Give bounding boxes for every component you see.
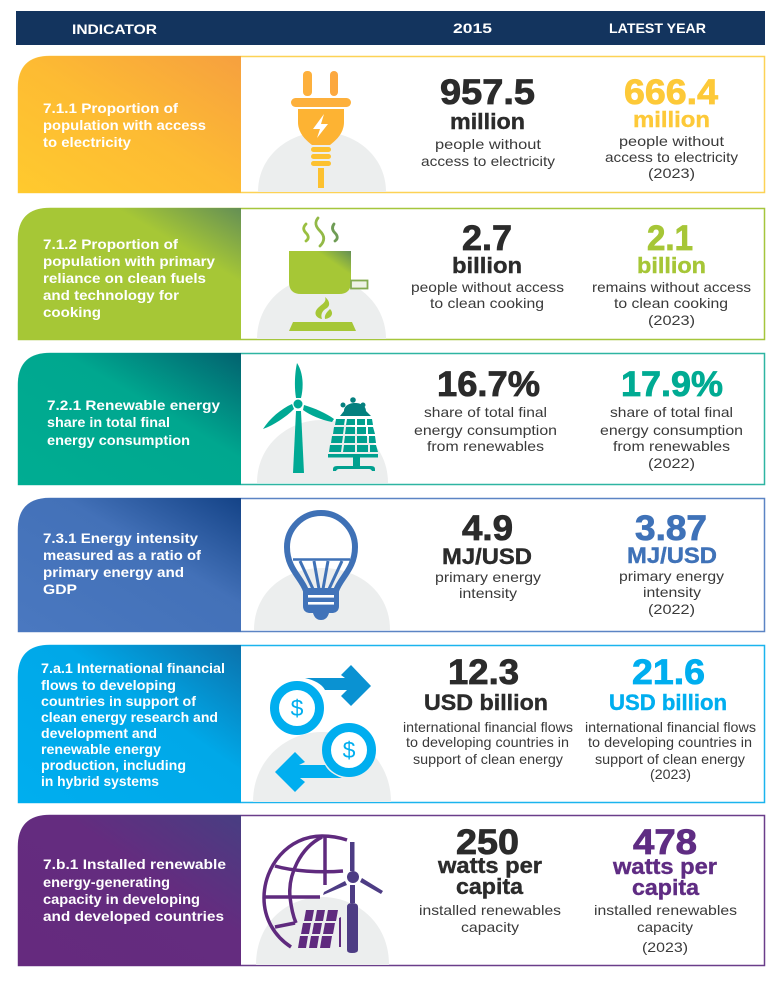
2015 value: clean cooking: people without access [411, 279, 564, 295]
2015 value: financial flows [403, 653, 573, 767]
latest value: renewable share: 17.9% [621, 365, 723, 404]
latest value: installed capacity: installed renewables [594, 902, 737, 918]
2015 value: financial flows: to developing countries in [406, 734, 569, 750]
header bar: 2015 [453, 20, 492, 36]
row: 7.1.1 electricity [18, 56, 764, 193]
latest value: electricity: (2023) [648, 165, 695, 181]
icon: cooking pot [257, 218, 386, 339]
latest value: renewable share: from renewables [613, 438, 730, 454]
icon: money flow arrows: $ [343, 737, 356, 763]
2015 value: installed capacity: capacity [461, 919, 519, 935]
2015 value: electricity: people without [435, 136, 541, 152]
indicator panel 7.a.1: clean energy research and [41, 709, 218, 725]
2015 value: clean cooking: billion [452, 253, 522, 278]
latest value: energy intensity: MJ/USD [627, 543, 717, 568]
latest value: electricity [605, 73, 738, 181]
latest value: installed capacity: capita [632, 875, 700, 900]
indicator panel 7.3.1 [18, 498, 241, 632]
2015 value: energy intensity: 4.9 [462, 509, 513, 548]
2015 value: energy intensity [435, 509, 541, 601]
indicator panel 7.a.1: in hybrid systems [41, 773, 159, 789]
indicator panel 7.1.2: cooking [43, 304, 101, 320]
2015 value: electricity: 957.5 [440, 73, 535, 112]
latest value: energy intensity [619, 509, 724, 617]
latest value: installed capacity: watts per [612, 854, 717, 879]
2015 value: installed capacity: watts per [437, 853, 542, 878]
indicator panel 7.a.1: production, including [41, 757, 186, 773]
indicator panel 7.a.1: 7.a.1 International financial [41, 660, 225, 676]
latest value: installed capacity [594, 823, 737, 955]
indicator panel 7.1.1 [18, 56, 241, 193]
latest value: clean cooking: remains without access [592, 279, 751, 295]
2015 value: installed capacity [419, 823, 561, 935]
latest value: financial flows: international financial flows [585, 719, 756, 735]
latest value: renewable share: (2022) [648, 455, 695, 471]
2015 value: electricity: access to electricity [421, 153, 555, 169]
latest value: renewable share: energy consumption [600, 422, 743, 438]
row: 7.1.2 clean cooking [18, 208, 764, 340]
2015 value: installed capacity: installed renewables [419, 902, 561, 918]
indicator panel 7.1.2: and technology for [43, 287, 180, 303]
2015 value: financial flows: 12.3 [448, 653, 519, 692]
2015 value: financial flows: support of clean energy [413, 751, 563, 767]
2015 value: electricity: million [450, 109, 525, 134]
indicator panel 7.a.1: flows to developing [41, 677, 176, 693]
indicator panel 7.1.2 [18, 208, 241, 340]
indicator panel 7.2.1 [18, 353, 241, 485]
indicator panel 7.2.1: energy consumption [47, 432, 190, 448]
latest value: energy intensity: primary energy [619, 568, 724, 584]
indicator panel 7.1.2: population with primary [43, 253, 215, 269]
latest value: energy intensity: intensity [643, 584, 701, 600]
icon: light bulb [254, 513, 390, 630]
latest value: renewable share [600, 365, 743, 471]
row: 7.a.1 financial flows [18, 645, 764, 803]
latest value: installed capacity: (2023) [642, 939, 688, 955]
latest value: financial flows: USD billion [609, 690, 727, 715]
icon: plug [258, 71, 386, 192]
indicator panel 7.3.1: GDP [43, 581, 77, 597]
indicator panel 7.1.1: to electricity [43, 134, 131, 150]
latest value: energy intensity: 3.87 [635, 509, 707, 548]
latest value: clean cooking: billion [637, 253, 706, 278]
indicator panel 7.a.1: renewable energy [41, 741, 161, 757]
indicator panel 7.b.1: 7.b.1 Installed renewable [43, 856, 226, 872]
latest value: installed capacity: capacity [637, 919, 693, 935]
2015 value: energy intensity: primary energy [435, 569, 541, 585]
2015 value: financial flows: international financial flows [403, 719, 573, 735]
2015 value: electricity [421, 73, 555, 169]
indicator panel 7.2.1: share in total final [47, 414, 170, 430]
icon: money flow arrows: $ [291, 695, 304, 721]
indicator panel 7.a.1: development and [41, 725, 157, 741]
icon: wind turbine and solar panel [257, 363, 388, 483]
latest value: installed capacity: 478 [633, 823, 697, 862]
latest value: energy intensity: (2022) [648, 601, 695, 617]
indicator panel 7.3.1: primary energy and [43, 564, 184, 580]
indicator panel 7.a.1: countries in support of [41, 693, 196, 709]
latest value: electricity: people without [619, 133, 724, 149]
latest value: renewable share: share of total final [610, 404, 733, 420]
2015 value: installed capacity: capita [456, 874, 524, 899]
indicator panel 7.1.2: 7.1.2 Proportion of [43, 236, 178, 252]
latest value: financial flows: support of clean energy [595, 751, 745, 767]
2015 value: clean cooking: 2.7 [462, 219, 512, 258]
latest value: financial flows: (2023) [650, 766, 691, 782]
latest value: financial flows: 21.6 [632, 653, 705, 692]
2015 value: financial flows: USD billion [424, 690, 548, 715]
indicator panel 7.b.1: capacity in developing [43, 891, 200, 907]
indicator panel 7.a.1 [18, 645, 241, 803]
2015 value: energy intensity: intensity [459, 585, 517, 601]
indicator panel 7.b.1: energy-generating [43, 874, 170, 890]
latest value: financial flows [585, 653, 756, 782]
row: 7.2.1 renewable share [18, 353, 764, 485]
header bar: LATEST YEAR [609, 20, 706, 36]
latest value: electricity: million [633, 107, 710, 132]
icon: globe, turbine and solar panel [256, 836, 389, 965]
icon: money flow arrows [253, 665, 391, 802]
header bar [16, 11, 765, 45]
latest value: financial flows: to developing countries in [588, 734, 752, 750]
indicator panel 7.2.1: 7.2.1 Renewable energy [47, 397, 220, 413]
2015 value: installed capacity: 250 [456, 823, 519, 862]
latest value: clean cooking: 2.1 [647, 219, 693, 258]
2015 value: renewable share [414, 365, 557, 454]
latest value: clean cooking: to clean cooking [614, 295, 728, 311]
row: 7.b.1 installed capacity [18, 815, 764, 966]
latest value: clean cooking [592, 219, 751, 328]
2015 value: renewable share: from renewables [427, 438, 544, 454]
latest value: electricity: 666.4 [624, 73, 719, 112]
indicator panel 7.b.1 [18, 815, 241, 966]
indicator panel 7.3.1: measured as a ratio of [43, 547, 201, 563]
2015 value: energy intensity: MJ/USD [442, 544, 532, 569]
indicator panel 7.3.1: 7.3.1 Energy intensity [43, 530, 198, 546]
latest value: electricity: access to electricity [605, 149, 738, 165]
2015 value: clean cooking: to clean cooking [430, 295, 544, 311]
header bar: INDICATOR [72, 21, 157, 37]
2015 value: renewable share: energy consumption [414, 422, 557, 438]
row: 7.3.1 energy intensity [18, 498, 764, 632]
indicator panel 7.1.2: reliance on clean fuels [43, 270, 206, 286]
2015 value: clean cooking [411, 219, 564, 311]
indicator panel 7.1.1: 7.1.1 Proportion of [43, 100, 178, 116]
2015 value: renewable share: share of total final [424, 404, 547, 420]
2015 value: renewable share: 16.7% [437, 365, 540, 404]
latest value: clean cooking: (2023) [648, 312, 695, 328]
indicator panel 7.b.1: and developed countries [43, 908, 224, 924]
indicator panel 7.1.1: population with access [43, 117, 206, 133]
